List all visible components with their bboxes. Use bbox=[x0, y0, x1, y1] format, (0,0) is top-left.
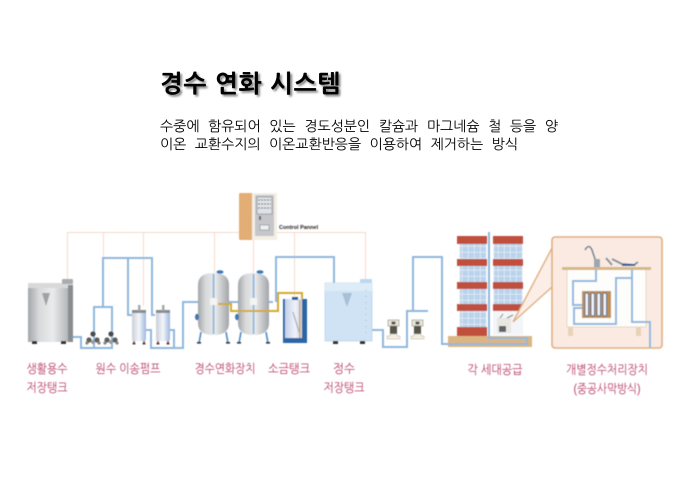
icon: control panel bbox=[239, 193, 319, 240]
label: softener: 경수연화장치 bbox=[194, 362, 256, 376]
label: individual unit: 개별정수처리장치 bbox=[566, 363, 648, 377]
labels: 저장탱크 bbox=[324, 381, 365, 395]
labels: (중공사막방식) bbox=[574, 382, 640, 396]
description text: 이온 교환수지의 이온교환반응을 이용하여 제거하는 방식 bbox=[160, 136, 518, 152]
title: 경수 연화 시스템 bbox=[160, 71, 341, 98]
label: clean water tank: 정수 bbox=[333, 362, 355, 376]
brine pipe bbox=[218, 293, 302, 311]
clean water storage tank bbox=[325, 279, 372, 344]
water pipes: supply section bbox=[73, 258, 273, 348]
label: control panel: Control Pannel bbox=[279, 225, 319, 231]
labels bbox=[26, 362, 648, 396]
control wiring bbox=[67, 232, 366, 306]
label: raw water tank: 생활용수 bbox=[26, 362, 68, 376]
panel: individual water treatment unit bbox=[552, 237, 662, 348]
booster pumps bbox=[387, 320, 424, 339]
description text: 수중에 함유되어 있는 경도성분인 칼슘과 마그네슘 철 등을 양 bbox=[160, 118, 558, 134]
raw water transfer pumps bbox=[85, 331, 119, 345]
apartment building bbox=[442, 232, 532, 347]
label: household supply: 각 세대공급 bbox=[468, 363, 523, 377]
icon: hollow fiber filter bbox=[582, 291, 611, 318]
label: salt tank: 소금탱크 bbox=[268, 362, 310, 376]
icon: faucet bbox=[585, 246, 596, 267]
supply pipes to building bbox=[372, 232, 527, 347]
description text bbox=[160, 118, 558, 152]
salt tank bbox=[283, 297, 307, 343]
unit pipes bbox=[573, 269, 650, 348]
label: transfer pump: 원수 이송펌프 bbox=[96, 362, 161, 376]
labels: 저장탱크 bbox=[26, 381, 68, 395]
pressure filters bbox=[132, 305, 170, 344]
callout wedge bbox=[513, 248, 552, 322]
softener tanks bbox=[195, 270, 270, 344]
softened water pipe bbox=[276, 257, 334, 302]
raw water storage tank bbox=[28, 279, 73, 344]
